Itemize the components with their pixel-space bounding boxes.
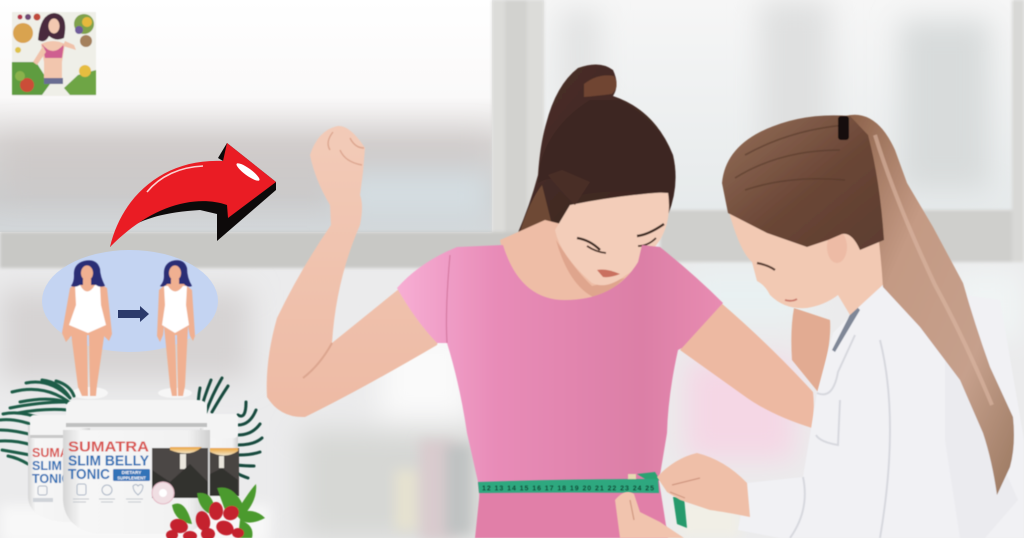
raised arm (267, 126, 450, 417)
face and neck (729, 175, 886, 315)
red curved arrow (110, 143, 276, 247)
main product jar (63, 400, 210, 534)
hair front (538, 100, 675, 197)
measuring woman in white coat, back arm (791, 308, 830, 392)
right arm (680, 302, 814, 428)
supplement badge: SUPPLEMENT (117, 476, 146, 480)
red berries with leaves (166, 484, 265, 538)
main product jar: TONIC (68, 466, 110, 483)
nurse: woman in white coat (722, 115, 1024, 538)
before figure (62, 260, 112, 399)
tape measure (478, 472, 687, 528)
tape measure: 12 13 14 15 16 17 18 19 20 21 22 23 24 25 (482, 486, 654, 492)
label text: SUMATRA (68, 438, 149, 456)
neck and chest (500, 220, 645, 311)
main product jar: SLIM BELLY (68, 452, 149, 470)
supplement badge (113, 469, 150, 481)
small jar left: TONIC (32, 472, 71, 486)
face (555, 192, 669, 285)
pink t-shirt (397, 245, 723, 538)
small jar left (28, 415, 90, 522)
long ponytail (845, 115, 1014, 495)
white coat (738, 283, 1024, 538)
before and after oval (42, 250, 218, 352)
hair top (722, 115, 884, 250)
after figure (157, 260, 195, 398)
palm fronds (0, 378, 262, 478)
small jar left: SLIM (32, 459, 62, 473)
small jar right (200, 414, 239, 515)
striped shirt collar (832, 305, 860, 352)
ponytail and hair back (517, 64, 676, 258)
hands holding tape (615, 453, 750, 538)
label icons (73, 484, 143, 502)
logo: woman with healthy food (12, 12, 96, 96)
client: woman in pink shirt (267, 64, 814, 538)
supplement badge: DIETARY (122, 470, 141, 475)
small jar left: SUMA (32, 446, 69, 460)
house photo on label (152, 447, 208, 504)
navy transition arrow (118, 306, 149, 322)
